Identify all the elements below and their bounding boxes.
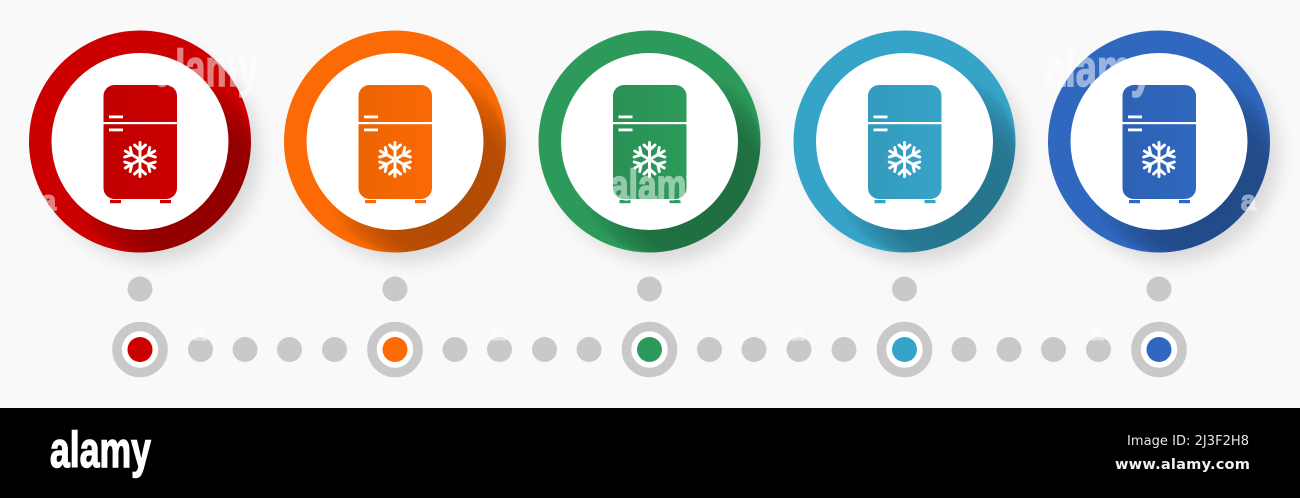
timeline: small connecting dots [188,337,1111,362]
icon badge: teal fridge [794,30,1024,262]
watermark overlays: a [790,323,805,345]
watermark overlays: alamy [610,161,705,210]
footer bar [0,408,1300,498]
watermark overlays: a [192,323,207,345]
watermark overlays: a [1089,323,1104,345]
watermark overlays: alamy [155,40,258,98]
watermark overlays: alamy [1044,40,1152,98]
footer image id: Image ID: 2J3F2H8 [1127,434,1249,449]
icon badge: green fridge [538,30,770,262]
timeline node: blue [1136,326,1182,372]
watermark overlays: a [41,185,56,216]
footer website: www.alamy.com [1115,456,1250,473]
icon badge: red fridge [29,30,260,262]
timeline node: teal [882,326,928,372]
timeline node: green [626,326,672,372]
timeline node: red [117,326,163,372]
timeline node: orange [372,326,418,372]
footer logo: alamy [50,422,151,478]
watermark overlays: a [491,323,506,345]
icon badge: orange fridge [284,30,515,262]
timeline: upper marker dots [128,276,1172,302]
watermark overlays [41,40,1256,345]
icon badge: blue fridge [1048,30,1279,262]
watermark overlays: a [1241,185,1256,216]
